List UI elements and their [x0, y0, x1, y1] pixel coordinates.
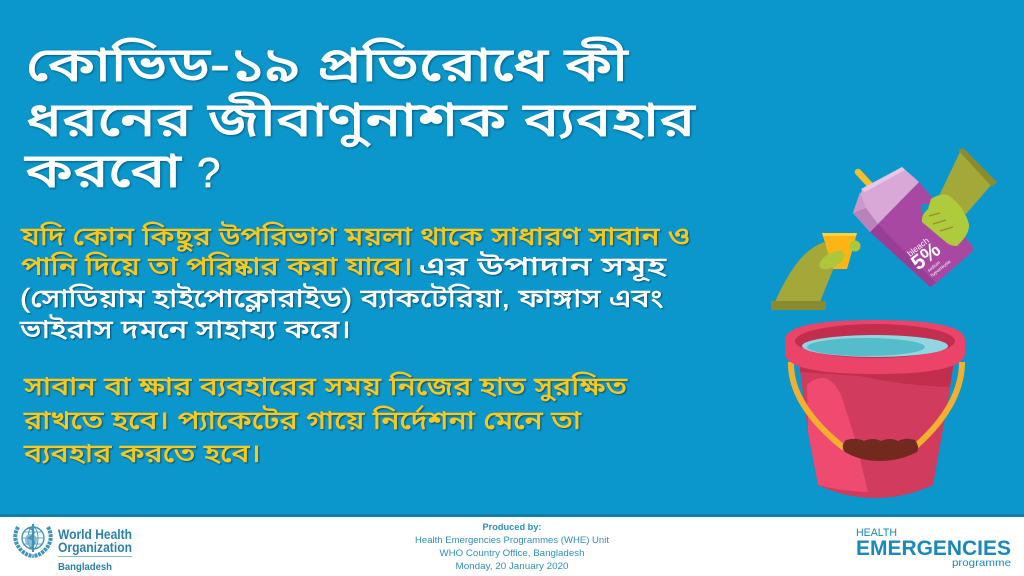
straw	[858, 172, 870, 185]
text block: hand safety: সাবান বা ক্ষার ব্যবহারের সময় নিজের হাত সুরক্ষিত	[23, 371, 628, 401]
icon: red bucket with water	[785, 320, 965, 498]
footer credits: WHO Country Office, Bangladesh	[440, 548, 584, 559]
title: ?	[197, 149, 220, 196]
text block: hand safety: ব্যবহার করতে হবে।	[23, 438, 261, 468]
footer credits: Produced by:	[482, 522, 542, 533]
label: sodium	[927, 260, 941, 273]
text block: surface cleaning: যদি কোন কিছুর উপরিভাগ ময়লা থাকে সাধারণ সাবান ও	[20, 221, 690, 252]
emblem	[15, 524, 51, 556]
label: bleach	[905, 235, 931, 259]
title: কোভিড-১৯ প্রতিরোধে কী	[26, 37, 630, 92]
text block: hand safety: রাখতে হবে। প্যাকেটের গায়ে নির্দেশনা মেনে তা	[23, 405, 582, 435]
Health Emergencies programme logo	[856, 527, 1011, 569]
Health Emergencies programme logo: programme	[952, 557, 1011, 569]
text block: surface cleaning	[19, 221, 690, 344]
text block: surface cleaning: ভাইরাস দমনে সাহায্য করে।	[19, 314, 351, 344]
Health Emergencies programme logo: HEALTH	[856, 527, 897, 539]
rim	[785, 320, 965, 374]
text block: surface cleaning: পানি দিয়ে তা পরিষ্কার করা যাবে।	[21, 251, 413, 281]
label: hypochlorite	[930, 259, 952, 278]
wordmark: World Health	[58, 527, 132, 542]
footer credits	[415, 522, 609, 572]
footer credits: Monday, 20 January 2020	[456, 561, 568, 572]
footer panel	[0, 517, 1024, 576]
bucket body	[799, 362, 954, 498]
icon: right arm and hand	[922, 148, 997, 246]
Health Emergencies programme logo: EMERGENCIES	[856, 537, 1011, 560]
wordmark: Bangladesh	[58, 561, 112, 573]
label: 5%	[907, 238, 945, 275]
title: করবো	[24, 145, 183, 198]
icon: bleach bottle 5% held by hand	[853, 167, 973, 287]
icon: hand holding yellow cup	[771, 233, 860, 310]
text block: surface cleaning: (সোডিয়াম হাইপোক্লোরাইড) ব্যাকটেরিয়া, ফাঙ্গাস এবং	[20, 283, 664, 313]
WHO logo	[15, 524, 132, 573]
footer credits: Health Emergencies Programmes (WHE) Unit	[415, 535, 609, 546]
text block: surface cleaning: এর উপাদান সমূহ	[419, 251, 668, 282]
handle hole	[921, 204, 933, 213]
lid	[853, 167, 919, 232]
title: ধরনের জীবাণুনাশক ব্যবহার	[26, 92, 697, 147]
title	[24, 37, 697, 198]
label	[905, 235, 952, 278]
wordmark: Organization	[58, 540, 132, 555]
bottle body	[870, 182, 973, 286]
handle	[791, 362, 962, 448]
water	[802, 335, 948, 357]
wordmark	[58, 527, 132, 573]
grip	[843, 439, 918, 461]
text block: hand safety	[23, 371, 628, 468]
